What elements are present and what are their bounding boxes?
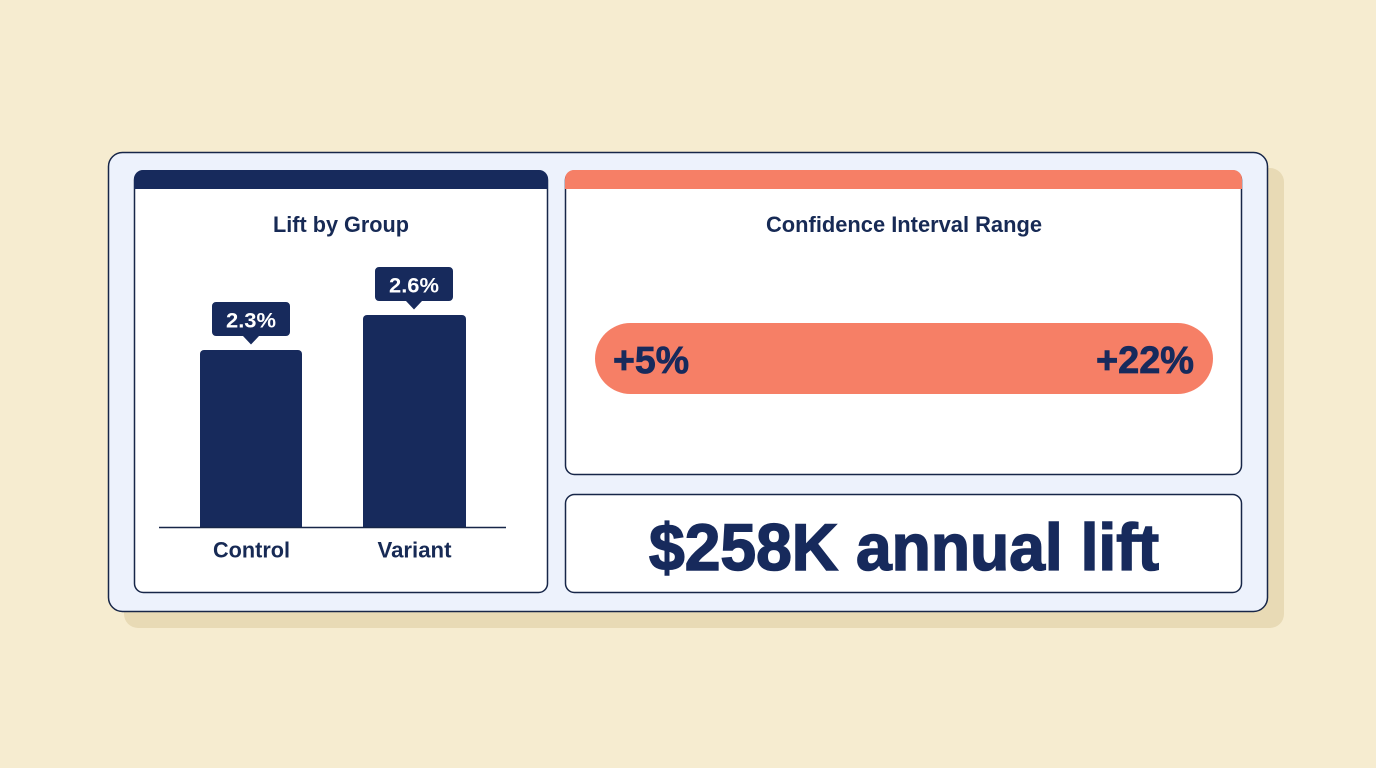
heading: lift by group: Lift by Group	[273, 212, 409, 237]
panel header bar	[134, 170, 548, 189]
card drop shadow	[124, 168, 1284, 628]
bar: variant	[363, 315, 466, 528]
value badge: control 2.3%	[212, 302, 290, 344]
callout background	[566, 494, 1242, 592]
value badge: variant 2.6%: 2.6%	[389, 274, 439, 298]
axis label: variant: Variant	[378, 538, 452, 562]
panel: annual lift callout	[566, 494, 1242, 592]
value badge: control 2.3%: 2.3%	[226, 310, 276, 332]
bar chart	[159, 267, 506, 562]
outer dashboard card	[108, 152, 1268, 612]
value badge: variant 2.6%	[375, 267, 453, 310]
range high value: +22%	[1096, 340, 1194, 382]
heading: confidence interval range: Confidence Interval Range	[766, 212, 1042, 237]
panel: confidence interval range	[565, 170, 1242, 474]
axis label: control: Control	[213, 538, 290, 562]
panel header bar	[565, 170, 1242, 189]
panel background	[566, 171, 1242, 474]
range low value: +5%	[613, 340, 689, 382]
panel: lift by group	[134, 170, 548, 592]
chart baseline	[159, 526, 506, 528]
callout text: $258K annual lift	[649, 510, 1159, 584]
confidence range bar	[595, 323, 1213, 394]
bar: control	[200, 350, 302, 528]
panel background	[134, 171, 548, 592]
